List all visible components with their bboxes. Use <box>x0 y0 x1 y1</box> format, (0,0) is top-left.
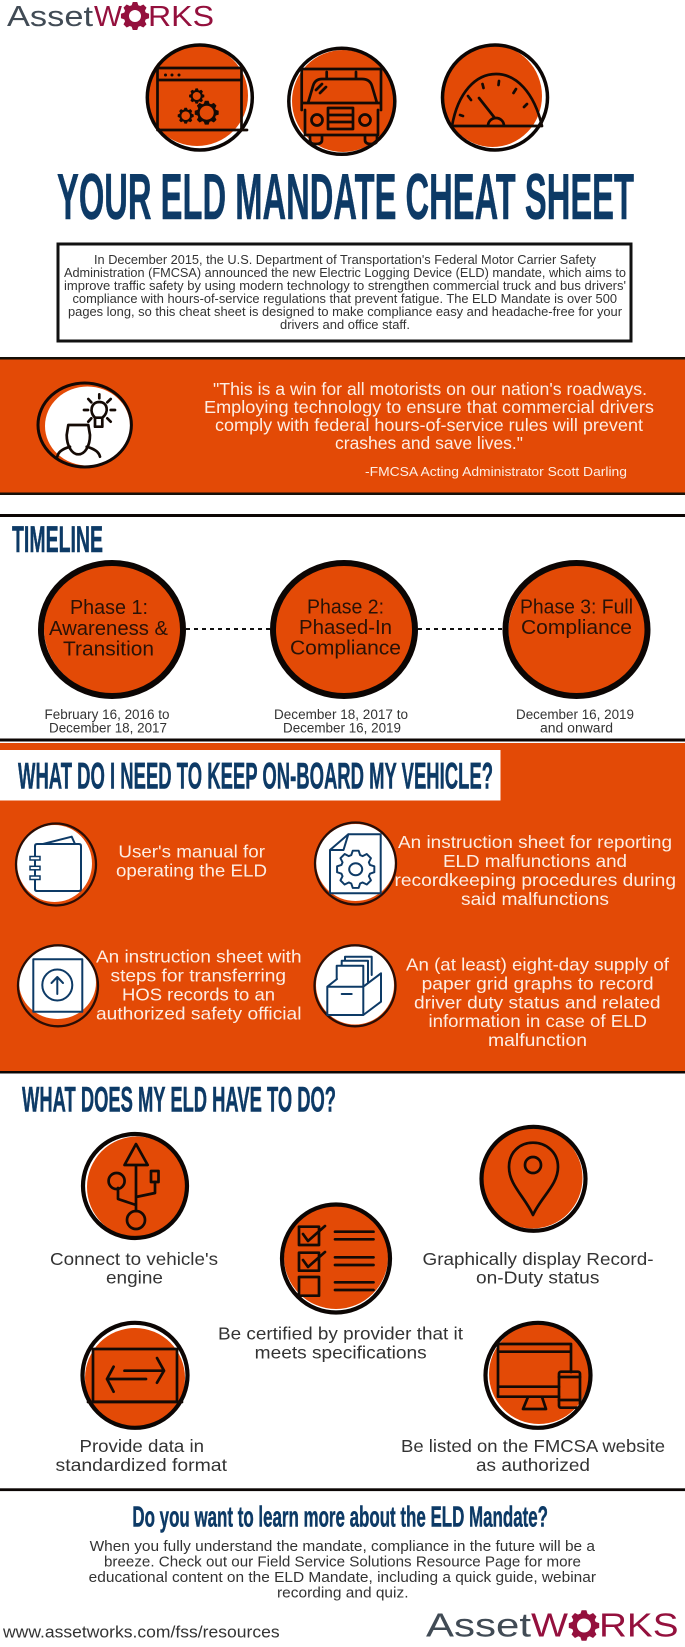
text block: learn more: When you fully understand the mandate, compliance in the future will be a <box>90 1538 596 1555</box>
heading: on-board <box>0 750 500 800</box>
text block: learn more <box>89 1538 596 1602</box>
requirement: certified by provider: meets specifications <box>255 1343 427 1363</box>
item: paper grid supply: information in case of ELD <box>428 1011 647 1031</box>
dotted connectors <box>186 628 502 630</box>
requirement: record-on-duty status: on-Duty status <box>476 1268 600 1288</box>
quote text: crashes and save lives." <box>335 433 523 453</box>
logo: bottom AssetWorks: Asset <box>426 1607 531 1644</box>
logo: top AssetWorks: W <box>94 1 123 33</box>
icon: person with lightbulb <box>38 383 131 467</box>
logo: top AssetWorks <box>7 1 214 33</box>
panel: quote band <box>0 357 685 495</box>
panel: introduction box: In December 2015, the U.S. Department of Transportation's Federal Motor Carrier Safety <box>94 253 597 267</box>
quote attribution: -FMCSA Acting Administrator Scott Darling <box>365 464 627 479</box>
quote text: Employing technology to ensure that commercial drivers <box>204 397 654 417</box>
item: transfer instruction sheet: HOS records to an <box>122 984 275 1004</box>
quote text: comply with federal hours-of-service rules will prevent <box>215 415 643 435</box>
requirement: listed on FMCSA website: as authorized <box>476 1455 590 1475</box>
timeline: phase 1 <box>41 563 183 696</box>
requirement: standardized format <box>56 1323 227 1475</box>
panel: introduction box: compliance with hours-of-service regulations that prevent fatigue. The ELD Mandate is over 500 <box>72 292 617 306</box>
logo: bottom AssetWorks: O <box>572 1607 595 1644</box>
requirement: listed on FMCSA website <box>401 1323 665 1475</box>
panel: introduction box: pages long, so this cheat sheet is designed to make compliance easy and headache-free for your <box>68 305 623 319</box>
requirement: standardized format: standardized format <box>56 1455 227 1475</box>
date: phase 3: and onward <box>540 720 613 736</box>
item: malfunction instruction sheet: said malfunctions <box>461 889 609 909</box>
date: phase 3 <box>516 707 634 736</box>
date: phase 3: December 16, 2019 <box>516 707 634 722</box>
text block: learn more: recording and quiz. <box>277 1585 408 1602</box>
requirement: record-on-duty status: Graphically display Record- <box>422 1249 654 1269</box>
panel: on-board requirements <box>0 743 685 1074</box>
timeline: phase 3 <box>506 563 648 696</box>
timeline: phase 1: Transition <box>63 638 154 660</box>
panel: introduction box <box>58 244 631 341</box>
icon: speedometer <box>442 45 548 150</box>
requirement: standardized format: Provide data in <box>80 1436 204 1456</box>
date: phase 1 <box>44 707 170 736</box>
item: user's manual: operating the ELD <box>116 860 267 880</box>
item: transfer instruction sheet: authorized safety official <box>96 1003 302 1023</box>
item: paper grid supply <box>314 945 669 1050</box>
timeline: phase 3: Phase 3: Full <box>520 596 633 618</box>
timeline: phase 2: Compliance <box>290 638 401 660</box>
requirement: connect to engine: engine <box>106 1268 163 1288</box>
requirement: certified by provider <box>218 1204 463 1363</box>
logo: top AssetWorks: Asset <box>7 1 93 33</box>
item: malfunction instruction sheet: ELD malfunctions and <box>443 851 627 871</box>
logo: bottom AssetWorks: RKS <box>599 1607 678 1644</box>
icon: browser with gears <box>146 45 252 150</box>
panel: introduction box: Administration (FMCSA) announced the new Electric Logging Device (ELD) mandate, which aims to <box>64 266 626 280</box>
item: paper grid supply: driver duty status and related <box>414 992 660 1012</box>
timeline: phase 2: Phase 2: <box>307 596 384 618</box>
logo: bottom AssetWorks: W <box>531 1607 569 1644</box>
timeline: phase 2 <box>273 563 415 696</box>
timeline: phase 2: Phased-In <box>299 617 392 639</box>
item: paper grid supply: malfunction <box>488 1030 587 1050</box>
item: paper grid supply: An (at least) eight-day supply of <box>406 954 669 974</box>
heading: what does my ELD have to do: WHAT DOES MY ELD HAVE TO DO? <box>22 1081 336 1120</box>
item: malfunction instruction sheet <box>315 822 676 909</box>
timeline: phase 1: Phase 1: <box>70 597 148 619</box>
date: phase 1: December 18, 2017 <box>49 720 167 736</box>
item: malfunction instruction sheet: An instruction sheet for reporting <box>398 832 672 852</box>
heading: timeline: TIMELINE <box>12 519 103 560</box>
quote text: "This is a win for all motorists on our nation's roadways. <box>213 379 647 399</box>
item: malfunction instruction sheet: recordkeeping procedures during <box>394 870 676 890</box>
item: transfer instruction sheet: An instruction sheet with <box>96 947 302 967</box>
requirement: connect to engine: Connect to vehicle's <box>50 1249 218 1269</box>
logo: top AssetWorks: RKS <box>148 1 214 33</box>
logo: top AssetWorks: O <box>125 1 144 33</box>
item: transfer instruction sheet <box>18 945 302 1026</box>
requirement: listed on FMCSA website: Be listed on the FMCSA website <box>401 1436 665 1456</box>
text block: learn more: breeze. Check out our Field Service Solutions Resource Page for more <box>104 1554 581 1571</box>
requirement: record-on-duty status <box>422 1127 654 1288</box>
timeline: phase 3: Compliance <box>521 617 632 639</box>
text block: learn more: educational content on the ELD Mandate, including a quick guide, webinar <box>89 1569 596 1586</box>
timeline: phase 1: Awareness & <box>49 618 169 640</box>
panel: introduction box: drivers and office staff. <box>280 318 410 332</box>
item: user's manual: User's manual for <box>118 842 265 862</box>
quote text <box>204 379 654 453</box>
requirement: connect to engine <box>50 1134 218 1288</box>
item: user's manual <box>16 824 267 906</box>
date: phase 2 <box>274 707 408 736</box>
logo: bottom AssetWorks <box>426 1607 678 1644</box>
date: phase 2: December 18, 2017 to <box>274 707 408 722</box>
requirement: certified by provider: Be certified by provider that it <box>218 1324 463 1344</box>
date: phase 1: February 16, 2016 to <box>44 707 170 722</box>
website url: www.assetworks.com/fss/resources <box>2 1622 280 1642</box>
item: paper grid supply: paper grid graphs to record <box>422 973 654 993</box>
item: transfer instruction sheet: steps for transferring <box>110 966 286 986</box>
date: phase 2: December 16, 2019 <box>283 720 401 736</box>
panel: introduction box: improve traffic safety by using modern technology to strengthen commercial truck and bus drivers' <box>64 279 626 293</box>
icon: truck front <box>289 48 395 154</box>
